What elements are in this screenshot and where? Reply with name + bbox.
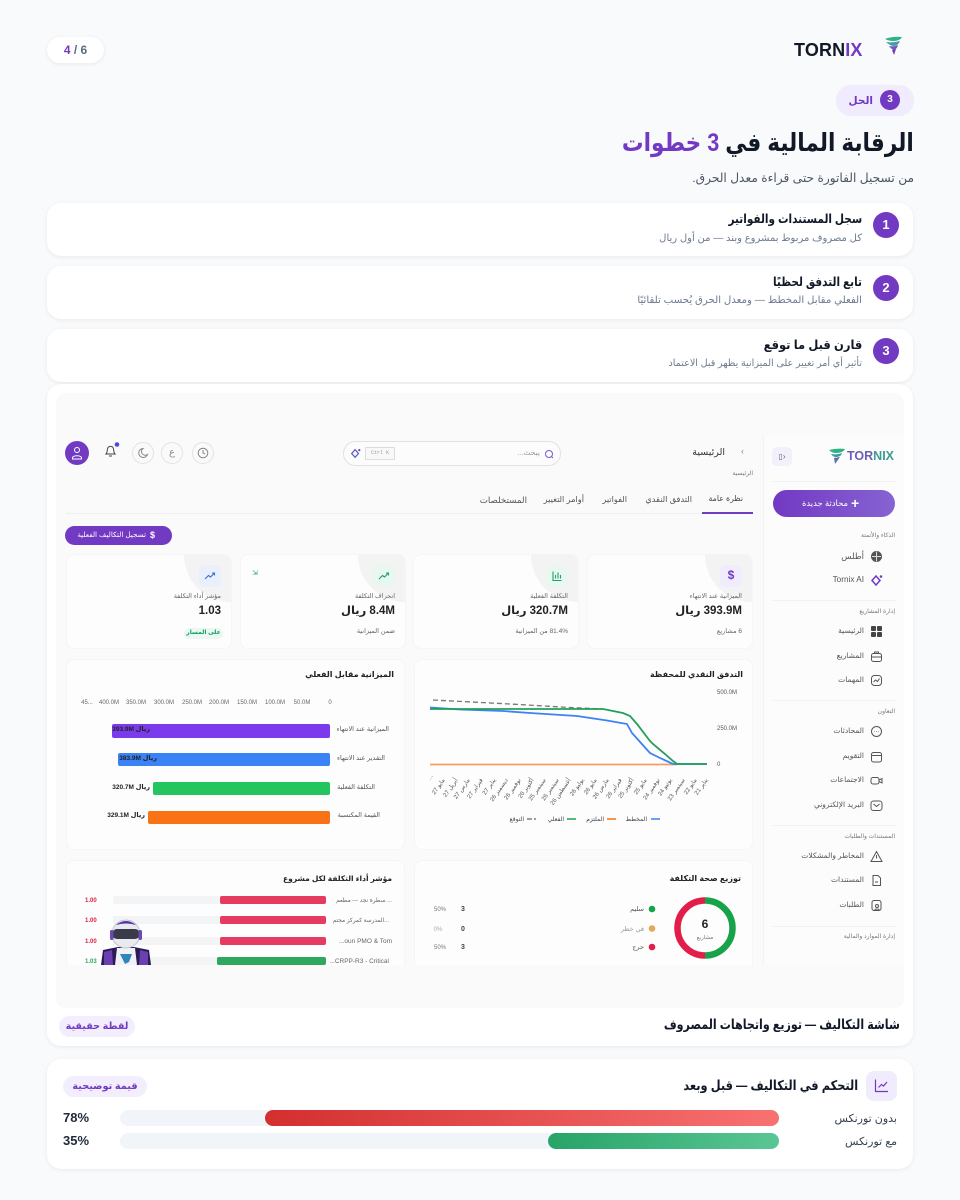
date axis: 27 مارس <box>452 777 472 800</box>
row 2: 1.00 <box>85 918 97 924</box>
section label: إدارة المشاريع <box>859 609 895 615</box>
nav item: risks: المخاطر والمشكلات <box>801 851 864 860</box>
page counter <box>47 37 104 63</box>
legend: at risk: 0% <box>434 927 443 933</box>
bar: estimate at completion: 383.9M ريال <box>119 755 157 762</box>
tabs <box>66 490 753 514</box>
row label: بدون تورنكس <box>834 1113 897 1125</box>
bar: estimate at completion <box>118 753 385 766</box>
dashboard screenshot <box>56 436 904 965</box>
KPI icon <box>373 565 395 587</box>
bar: earned value <box>107 811 380 824</box>
row value: 35% <box>63 1133 89 1148</box>
KPI value: 393.9M ريال <box>675 605 742 617</box>
date axis: 26 مايو <box>582 777 599 796</box>
real capture pill <box>59 1016 135 1037</box>
button label: محادثة جديدة <box>802 498 848 508</box>
series: planned <box>430 708 707 764</box>
row 3 <box>85 937 392 945</box>
chart legend: الفعلي <box>548 816 564 823</box>
KPI icon <box>546 565 568 587</box>
icon: notification bell <box>104 442 120 456</box>
bar: earned value: 329.1M ريال <box>107 812 145 819</box>
value axis <box>81 700 332 706</box>
progress track <box>120 1110 779 1126</box>
brand wordmark: TORNIX <box>794 40 863 60</box>
row 2: المدرسة كمركز مجتم... <box>333 917 389 924</box>
series: actual <box>430 709 707 764</box>
bar: actual cost <box>112 782 375 795</box>
tab: claims: المستخلصات <box>480 495 527 505</box>
icon: dollar: $ <box>150 530 155 540</box>
date axis: ... <box>427 773 435 781</box>
nav item: tornix ai <box>832 575 882 586</box>
value axis: 300.0M <box>154 700 174 706</box>
nav item: tornix ai: Tornix AI <box>833 575 864 584</box>
row 2 <box>85 916 389 924</box>
legend: critical: حرج <box>632 944 644 951</box>
icon: search <box>545 450 554 458</box>
panel: screenshot card <box>47 384 913 1046</box>
badge number <box>880 90 900 110</box>
user avatar <box>65 441 89 465</box>
brand logo <box>794 36 902 60</box>
step description: تأثير أي أمر تغيير على الميزانية يظهر قبل الاعتماد <box>668 358 862 369</box>
KPI note: 81.4% من الميزانية <box>515 628 568 635</box>
panel: before and after <box>47 1059 913 1169</box>
date axis: 22 مايو <box>682 777 699 796</box>
date axis: 26 مارس <box>591 777 611 800</box>
value axis: 100.0M <box>265 700 285 706</box>
value axis: 150.0M <box>237 700 257 706</box>
nav item: requests: الطلبات <box>839 900 864 909</box>
chart legend: المخطط <box>626 816 647 823</box>
KPI: actual cost <box>413 554 579 649</box>
real capture pill: لقطة حقيقية <box>66 1021 128 1032</box>
nav item: requests <box>839 900 882 911</box>
icon: sparkle <box>350 448 360 458</box>
value axis: 400.0M <box>99 700 119 706</box>
nav item: tasks <box>838 675 882 686</box>
nav item: projects: المشاريع <box>837 651 864 660</box>
row 4: 1.03 <box>85 959 97 965</box>
search box <box>343 441 561 466</box>
nav item: projects <box>837 651 882 662</box>
donut chart <box>677 900 732 956</box>
keyboard shortcut <box>365 447 395 460</box>
KPI icon <box>720 565 742 587</box>
legend: critical <box>434 944 655 951</box>
chart legend: التوقع <box>510 816 524 823</box>
KPI label: التكلفة الفعلية <box>530 593 568 600</box>
brand swirl icon <box>885 36 902 55</box>
panel: cost health donut <box>414 860 753 990</box>
KPI icon: $ <box>728 568 734 582</box>
legend: healthy <box>434 906 655 913</box>
nav item: home: الرئيسية <box>838 626 864 635</box>
nav item: home <box>838 626 882 637</box>
date axis: 26 ديسمبر <box>489 777 510 803</box>
date axis: 26 فبراير <box>605 777 624 800</box>
section label: التعاون <box>878 709 895 715</box>
bar: estimate at completion: التقدير عند الانتهاء <box>337 755 385 762</box>
panel: cash flow chart <box>414 659 753 850</box>
date axis: 23 سبتمبر <box>667 778 687 802</box>
nav item: atlas: أطلس <box>841 551 864 561</box>
row: with tornix <box>63 1133 897 1149</box>
date axis <box>427 773 710 807</box>
date axis: 24 يونيو <box>657 777 674 797</box>
nav item: calendar <box>843 751 882 762</box>
step card 2 <box>47 266 913 319</box>
section badge <box>836 85 914 116</box>
nav item: documents <box>831 875 881 886</box>
row value: 78% <box>63 1110 89 1125</box>
legend: healthy: 50% <box>434 907 447 913</box>
nav item: email: البريد الإلكتروني <box>814 800 864 809</box>
step number <box>873 338 899 364</box>
series: committed <box>430 764 677 766</box>
collapse button: ▯› <box>778 452 786 461</box>
progress track <box>120 1133 779 1149</box>
logo wordmark: TORNIX <box>847 449 894 463</box>
date axis: 26 أكتوبر <box>516 776 536 800</box>
legend: healthy: سليم <box>630 906 644 913</box>
step number: 3 <box>882 343 890 358</box>
date axis: 21 يناير <box>693 777 710 796</box>
trend arrow: ⇲ <box>252 570 258 577</box>
step number <box>873 212 899 238</box>
donut chart: مشاريع <box>697 935 713 941</box>
nav item: risks <box>801 850 883 862</box>
panel heading: التحكم في التكاليف — قبل وبعد <box>683 1078 858 1093</box>
button: theme <box>132 442 154 464</box>
search placeholder: يبحث... <box>517 448 540 457</box>
screenshot caption: شاشة التكاليف — توزيع واتجاهات المصروف <box>664 1017 900 1032</box>
KPI value: 320.7M ريال <box>501 605 568 617</box>
tab: overview: نظرة عامة <box>708 494 743 503</box>
legend: critical: 3 <box>461 944 465 951</box>
icon: user <box>72 447 82 460</box>
row 4 <box>85 957 390 965</box>
step number <box>873 275 899 301</box>
illustrative value pill: قيمة توضيحية <box>72 1081 138 1092</box>
step heading: قارن قبل ما توقع <box>763 338 862 352</box>
value axis: 350.0M <box>126 700 146 706</box>
value axis: 50.0M <box>294 700 310 706</box>
date axis: 25 مايو <box>632 777 649 796</box>
date axis: 27 يناير <box>481 777 498 796</box>
donut chart: 6 <box>702 917 709 931</box>
tab: cash flow: التدفق النقدي <box>645 495 692 504</box>
step heading: سجل المستندات والفواتير <box>728 212 862 226</box>
value axis: 200.0M <box>209 700 229 706</box>
illustrative value pill <box>63 1076 147 1097</box>
value axis: 250.0M <box>182 700 202 706</box>
sidebar logo <box>829 448 894 464</box>
row: without tornix <box>63 1110 897 1126</box>
chart title: توزيع صحة التكلفة <box>670 874 741 883</box>
date axis: 27 مايو <box>430 777 447 796</box>
nav item: meetings: الاجتماعات <box>830 775 864 784</box>
page counter: 4 / 6 <box>64 43 87 57</box>
nav item: calendar: التقويم <box>843 751 864 760</box>
button: language <box>161 442 183 464</box>
row label: مع تورنكس <box>845 1136 897 1148</box>
tab: change orders: أوامر التغيير <box>544 495 584 504</box>
page heading: الرئيسية <box>692 447 725 458</box>
date axis: 26 يوليو <box>569 777 586 797</box>
nav item: tasks: المهمات <box>838 675 864 684</box>
KPI note: ضمن الميزانية <box>357 628 395 635</box>
value axis: 0 <box>328 700 332 706</box>
KPI label: مؤشر أداء التكلفة <box>174 593 221 600</box>
date axis: 26 أغسطس <box>548 776 573 807</box>
collapse button <box>772 447 792 466</box>
value axis: 45... <box>81 700 93 706</box>
KPI value: 8.4M ريال <box>341 605 395 617</box>
date axis: 27 أبريل <box>441 776 460 799</box>
date axis: 25 سبتمبر <box>528 778 548 802</box>
section label: إدارة الموارد والمالية <box>844 934 895 940</box>
date axis: 27 فبراير <box>466 777 485 800</box>
nav item: chats <box>833 726 882 737</box>
progress fill <box>548 1133 779 1149</box>
nav item: meetings <box>830 775 882 784</box>
row 1: 1.00 <box>85 898 97 904</box>
bar: actual cost: التكلفة الفعلية <box>337 784 375 791</box>
bar: earned value: القيمة المكتسبة <box>338 812 380 819</box>
step heading: تابع التدفق لحظيًا <box>773 275 862 289</box>
row 1: سطرة نجد — مطعم ... <box>336 898 392 904</box>
section label: الذكاء والأتمتة <box>861 533 895 539</box>
chart title: التدفق النقدي للمحفظة <box>650 670 743 679</box>
button label: تسجيل التكاليف الفعلية <box>77 530 146 539</box>
step card 1 <box>47 203 913 256</box>
plus icon: + <box>851 495 859 511</box>
chart title: مؤشر أداء التكلفة لكل مشروع <box>283 873 392 883</box>
value axis: 500.0M <box>717 690 737 696</box>
badge label: الحل <box>849 95 873 107</box>
value axis: 250.0M <box>717 726 737 732</box>
KPI status pill <box>184 628 223 639</box>
legend: critical: 50% <box>434 945 447 951</box>
section label: المستندات والطلبات <box>844 834 895 840</box>
KPI status pill: على المسار <box>186 630 221 636</box>
breadcrumb: الرئيسية <box>732 471 753 477</box>
KPI: cost variance <box>240 554 406 649</box>
legend: at risk <box>434 925 655 933</box>
panel: budget vs actual chart <box>66 659 405 850</box>
record costs button <box>65 526 172 545</box>
step description: كل مصروف مربوط بمشروع وبند — من أول ريال <box>659 233 862 244</box>
step number: 2 <box>882 280 890 295</box>
step card 3 <box>47 329 913 382</box>
date axis: 26 سبتمبر <box>541 778 561 802</box>
chart legend <box>510 816 660 823</box>
bar: budget at completion: 393.9M ريال <box>112 726 150 733</box>
logo swirl <box>829 448 845 464</box>
step description: الفعلي مقابل المخطط — ومعدل الحرق يُحسب تلقائيًا <box>637 295 862 306</box>
KPI: CPI <box>66 554 232 649</box>
button: clock <box>192 442 214 464</box>
robot mascot <box>101 920 151 965</box>
row 3: 1.00 <box>85 939 97 945</box>
row 4: ...CRPP-R3 - Critical <box>329 958 390 965</box>
legend: healthy: 3 <box>461 906 465 913</box>
new chat button <box>773 490 895 517</box>
chart title: الميزانية مقابل الفعلي <box>305 670 394 679</box>
tab: invoices: الفواتير <box>602 495 627 504</box>
legend: at risk: 0 <box>461 926 465 933</box>
active tab underline <box>702 512 753 514</box>
series: forecast <box>433 700 603 709</box>
panel: CPI by project <box>66 860 405 990</box>
date axis: 25 أكتوبر <box>616 776 636 800</box>
bar: actual cost: 320.7M ريال <box>112 784 150 791</box>
KPI label: الميزانية عند الانتهاء <box>690 593 742 600</box>
keyboard shortcut: Ctrl K <box>371 450 389 456</box>
icon: chart <box>866 1071 897 1101</box>
nav item: email <box>814 800 882 811</box>
KPI value: 1.03 <box>199 605 221 617</box>
KPI label: انحراف التكلفة <box>355 593 395 600</box>
KPI icon <box>199 565 221 587</box>
nav item: documents: المستندات <box>831 875 864 884</box>
button: language: ع <box>169 447 175 458</box>
nav item: chats: المحادثات <box>833 726 864 735</box>
value axis: 0 <box>717 762 721 768</box>
row 1 <box>85 896 392 904</box>
legend: at risk: في خطر <box>620 926 644 933</box>
chevron: ‹ <box>741 446 744 456</box>
title: الرقابة المالية في 3 خطوات <box>622 129 914 157</box>
screenshot backdrop <box>56 393 904 1008</box>
nav item: atlas <box>841 550 882 562</box>
row 3: ...oun PMO & Tom <box>339 938 392 945</box>
KPI: budget at completion <box>587 554 753 649</box>
value axis <box>717 690 737 768</box>
progress fill <box>265 1110 779 1126</box>
bar: budget at completion: الميزانية عند الانتهاء <box>337 726 389 733</box>
KPI note: 6 مشاريع <box>717 628 742 635</box>
badge number: 3 <box>887 94 893 105</box>
chart legend: الملتزم <box>586 816 604 823</box>
subtitle: من تسجيل الفاتورة حتى قراءة معدل الحرق. <box>692 171 914 185</box>
bar: budget at completion <box>112 724 389 738</box>
date axis: 26 نوفمبر <box>504 777 523 801</box>
panel: sidebar <box>763 436 904 965</box>
date axis: 24 نوفمبر <box>643 777 662 801</box>
step number: 1 <box>882 217 890 232</box>
